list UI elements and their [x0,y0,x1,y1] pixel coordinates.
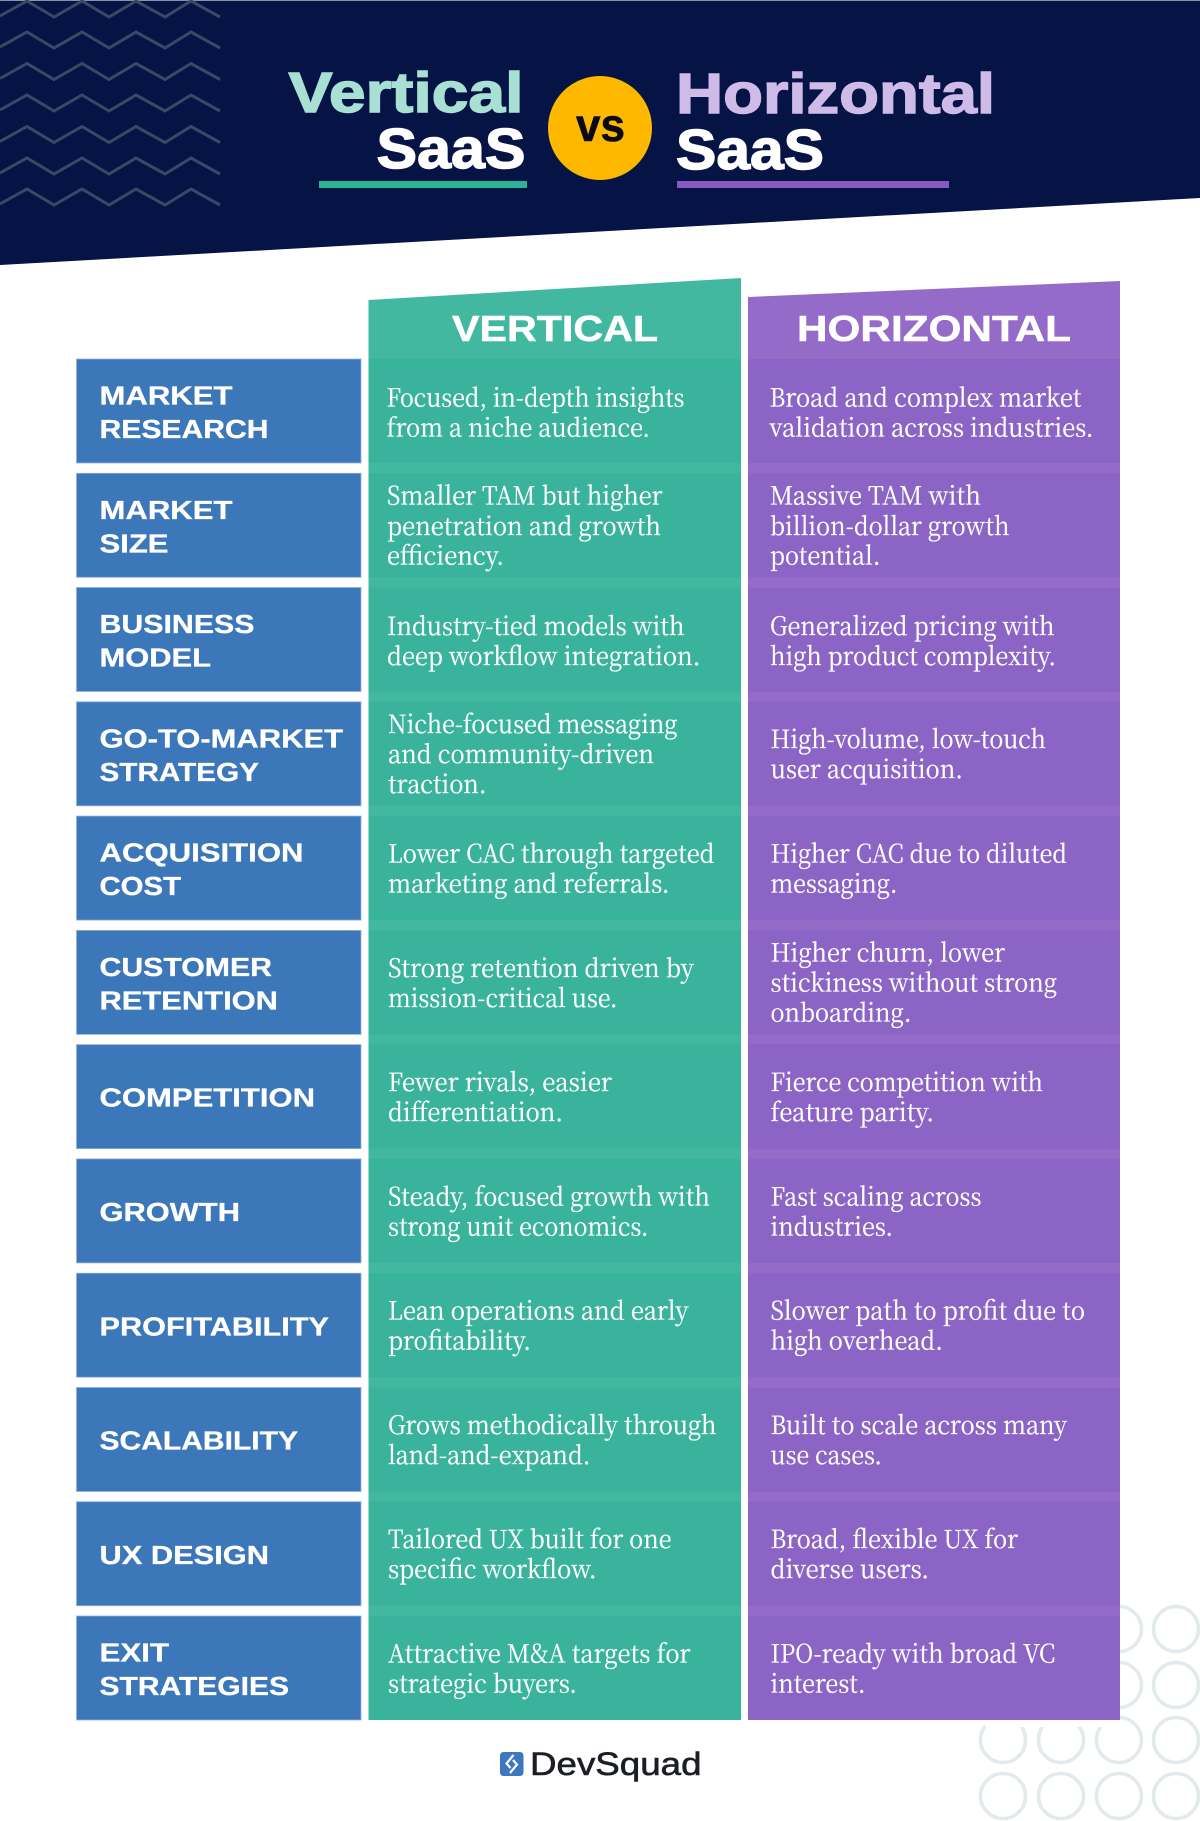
row: scalability horizontal: use cases. [770,1436,882,1472]
row: market size label: SIZE [100,528,168,558]
row: growth vertical: strong unit economics. [388,1207,648,1243]
row: competition label: COMPETITION [100,1083,315,1113]
row: market size vertical: penetration and growth [387,507,661,543]
title: Vertical SaaS: SaaS [376,117,526,181]
row: customer retention vertical: mission-critical use. [388,979,618,1015]
row: scalability vertical: Grows methodically through [388,1406,716,1442]
row: profitability vertical: Lean operations and early [388,1292,689,1328]
column: vertical header [368,278,741,1720]
row: go-to-market strategy horizontal [748,702,1120,806]
row: exit strategies vertical [368,1616,741,1720]
row: acquisition cost horizontal: messaging. [770,865,898,901]
row: profitability horizontal: high overhead. [770,1322,943,1358]
row: exit strategies label [76,1616,361,1720]
row: go-to-market strategy label: GO-TO-MARKET [100,723,343,753]
row: competition horizontal: feature parity. [770,1093,934,1129]
row: go-to-market strategy label: STRATEGY [100,757,259,787]
row: market research horizontal: validation across industries. [769,408,1094,444]
column: vertical header: VERTICAL [452,308,658,349]
row: customer retention horizontal: onboarding. [770,994,912,1030]
row: exit strategies label: STRATEGIES [100,1671,289,1701]
decorative circles [980,1606,1198,1818]
row: acquisition cost horizontal: Higher CAC due to diluted [770,835,1067,871]
row: market size vertical: Smaller TAM but higher [387,476,663,512]
row: competition vertical [368,1045,741,1149]
row: customer retention horizontal: Higher churn, lower [770,934,1005,970]
row: ux design vertical [368,1502,741,1606]
title: Horizontal SaaS: SaaS [676,118,824,182]
row: acquisition cost vertical: marketing and referrals. [388,865,670,901]
row: scalability horizontal: Built to scale across many [770,1406,1067,1442]
row: customer retention label: RETENTION [100,985,278,1015]
row: business model vertical [368,588,741,692]
row: acquisition cost label: ACQUISITION [100,838,304,868]
row: competition label [76,1045,361,1149]
row: ux design label: UX DESIGN [100,1540,269,1570]
row: customer retention label: CUSTOMER [100,952,272,982]
row: go-to-market strategy horizontal: High-volume, low-touch [770,720,1046,756]
row: scalability vertical [368,1388,741,1492]
row: profitability label: PROFITABILITY [100,1311,329,1341]
row: ux design vertical: Tailored UX built for one [388,1520,672,1556]
row: market size label [76,473,361,577]
row: profitability vertical: profitability. [388,1322,531,1358]
column: horizontal header [748,281,1120,1720]
row: business model horizontal: high product complexity. [770,637,1056,673]
row: acquisition cost label [76,816,361,920]
title: Vertical SaaS: Vertical [288,61,524,125]
row: market size vertical [368,473,741,577]
row: growth vertical: Steady, focused growth with [388,1177,710,1213]
row: market size vertical: efficiency. [387,536,504,572]
row: go-to-market strategy vertical [368,702,741,806]
row: business model label [76,588,361,692]
row: business model horizontal [748,588,1120,692]
row: market research label: RESEARCH [100,414,268,444]
row: exit strategies vertical: strategic buyers. [388,1664,577,1700]
row: growth horizontal [748,1159,1120,1263]
header banner [0,0,1200,265]
row: exit strategies horizontal: IPO-ready with broad VC [770,1634,1055,1670]
row: business model horizontal: Generalized pricing with [770,607,1054,643]
row: profitability horizontal: Slower path to profit due to [770,1292,1085,1328]
row: scalability vertical: land-and-expand. [388,1436,590,1472]
row: customer retention vertical [368,930,741,1034]
row: growth label [76,1159,361,1263]
row: market size horizontal: Massive TAM with [770,476,981,512]
row: business model vertical: Industry-tied models with [387,607,684,643]
row: growth label: GROWTH [100,1197,240,1227]
row: acquisition cost vertical: Lower CAC through targeted [388,835,715,871]
row: competition horizontal [748,1045,1120,1149]
row: exit strategies horizontal: interest. [770,1664,866,1700]
row: ux design horizontal [748,1502,1120,1606]
row: go-to-market strategy vertical: and community-driven [388,735,654,771]
row: exit strategies vertical: Attractive M&A targets for [388,1634,691,1670]
row: market research vertical: from a niche audience. [386,408,650,444]
row: ux design vertical: specific workflow. [388,1550,596,1586]
logo: DevSquad: DevSquad [530,1746,702,1782]
row: customer retention label [76,930,361,1034]
row: growth horizontal: Fast scaling across [770,1177,982,1213]
column: horizontal header: HORIZONTAL [797,308,1071,349]
row: market research vertical [368,359,741,463]
row: exit strategies label: EXIT [100,1638,169,1668]
row: customer retention horizontal: stickiness without strong [770,964,1057,1000]
row: business model vertical: deep workflow integration. [387,637,700,673]
row: business model label: BUSINESS [100,609,254,639]
badge: vs: vs [576,99,625,151]
row: acquisition cost vertical [368,816,741,920]
row: go-to-market strategy label [76,702,361,806]
row: go-to-market strategy horizontal: user acquisition. [770,750,963,786]
row: market size label: MARKET [100,495,233,525]
title: Vertical SaaS [288,61,527,188]
row: profitability label [76,1273,361,1377]
badge: vs [548,76,652,180]
row: growth horizontal: industries. [770,1207,893,1243]
row: market research vertical: Focused, in-depth insights [386,378,684,414]
row: market research horizontal: Broad and complex market [770,378,1082,414]
row: scalability horizontal [748,1388,1120,1492]
row: scalability label [76,1388,361,1492]
title: Horizontal SaaS [676,62,995,188]
row: market size horizontal: potential. [770,536,880,572]
row: business model label: MODEL [100,642,211,672]
row: market research label: MARKET [100,380,233,410]
row: market size horizontal [748,473,1120,577]
row: customer retention vertical: Strong retention driven by [388,949,694,985]
row: ux design horizontal: diverse users. [770,1550,929,1586]
row: market research horizontal [748,359,1120,463]
row: go-to-market strategy vertical: traction. [388,765,486,801]
row: profitability vertical [368,1273,741,1377]
row: competition vertical: Fewer rivals, easier [388,1063,612,1099]
row: scalability label: SCALABILITY [100,1426,298,1456]
row: go-to-market strategy vertical: Niche-focused messaging [388,705,678,741]
row: exit strategies horizontal [748,1616,1120,1720]
title: Horizontal SaaS: Horizontal [676,62,995,126]
row: growth vertical [368,1159,741,1263]
row: profitability horizontal [748,1273,1120,1377]
row: market size horizontal: billion-dollar growth [770,507,1010,543]
row: market research label [76,359,361,463]
row: acquisition cost label: COST [100,871,181,901]
row: ux design horizontal: Broad, flexible UX for [770,1520,1018,1556]
row: competition vertical: differentiation. [388,1093,563,1129]
row: ux design label [76,1502,361,1606]
row: customer retention horizontal [748,930,1120,1034]
row: acquisition cost horizontal [748,816,1120,920]
row: competition horizontal: Fierce competition with [770,1063,1043,1099]
